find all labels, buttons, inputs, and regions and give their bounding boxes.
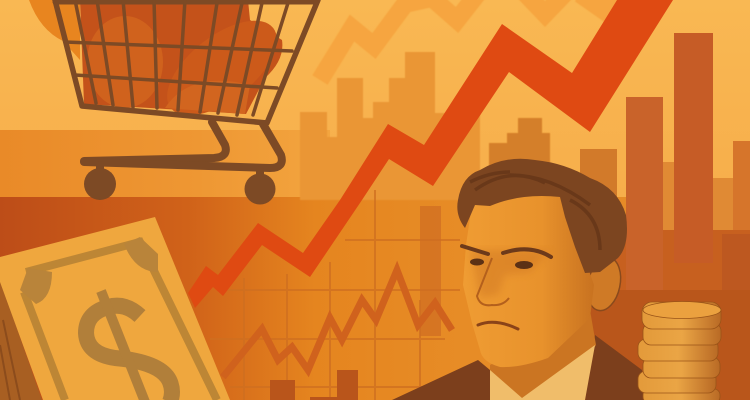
ear	[583, 254, 625, 314]
cart wires	[65, 0, 292, 115]
faded background trend line	[320, 0, 615, 80]
top-left sun shape	[29, 0, 80, 60]
brows	[462, 246, 551, 257]
cart basket	[55, 0, 318, 123]
collar	[490, 345, 595, 400]
cart wheels	[84, 168, 276, 204]
shopping cart	[55, 0, 318, 204]
cart contents	[80, 0, 293, 133]
stack edge	[0, 280, 42, 400]
mid line chart	[223, 270, 452, 377]
small bar chart	[270, 206, 441, 400]
eyes	[470, 258, 533, 269]
hair shading	[470, 172, 600, 250]
note corners	[20, 237, 158, 304]
main rising red arrow line	[188, 0, 673, 308]
jacket	[392, 335, 645, 400]
right-side tall bars	[560, 33, 750, 400]
man portrait	[392, 159, 645, 400]
chart grid panel	[210, 190, 470, 400]
skyline: left buildings	[300, 52, 480, 200]
dollar sign	[86, 291, 172, 400]
neck	[490, 310, 596, 400]
face shading	[470, 250, 550, 298]
banknote	[0, 217, 230, 400]
note paper	[0, 217, 230, 400]
cart undercarriage	[84, 122, 226, 161]
skyline: centre buildings	[489, 118, 550, 170]
hair	[457, 159, 627, 273]
nose	[477, 258, 509, 305]
coin stack	[638, 302, 721, 400]
face	[463, 195, 594, 367]
mouth	[478, 322, 518, 329]
note border	[24, 242, 217, 400]
